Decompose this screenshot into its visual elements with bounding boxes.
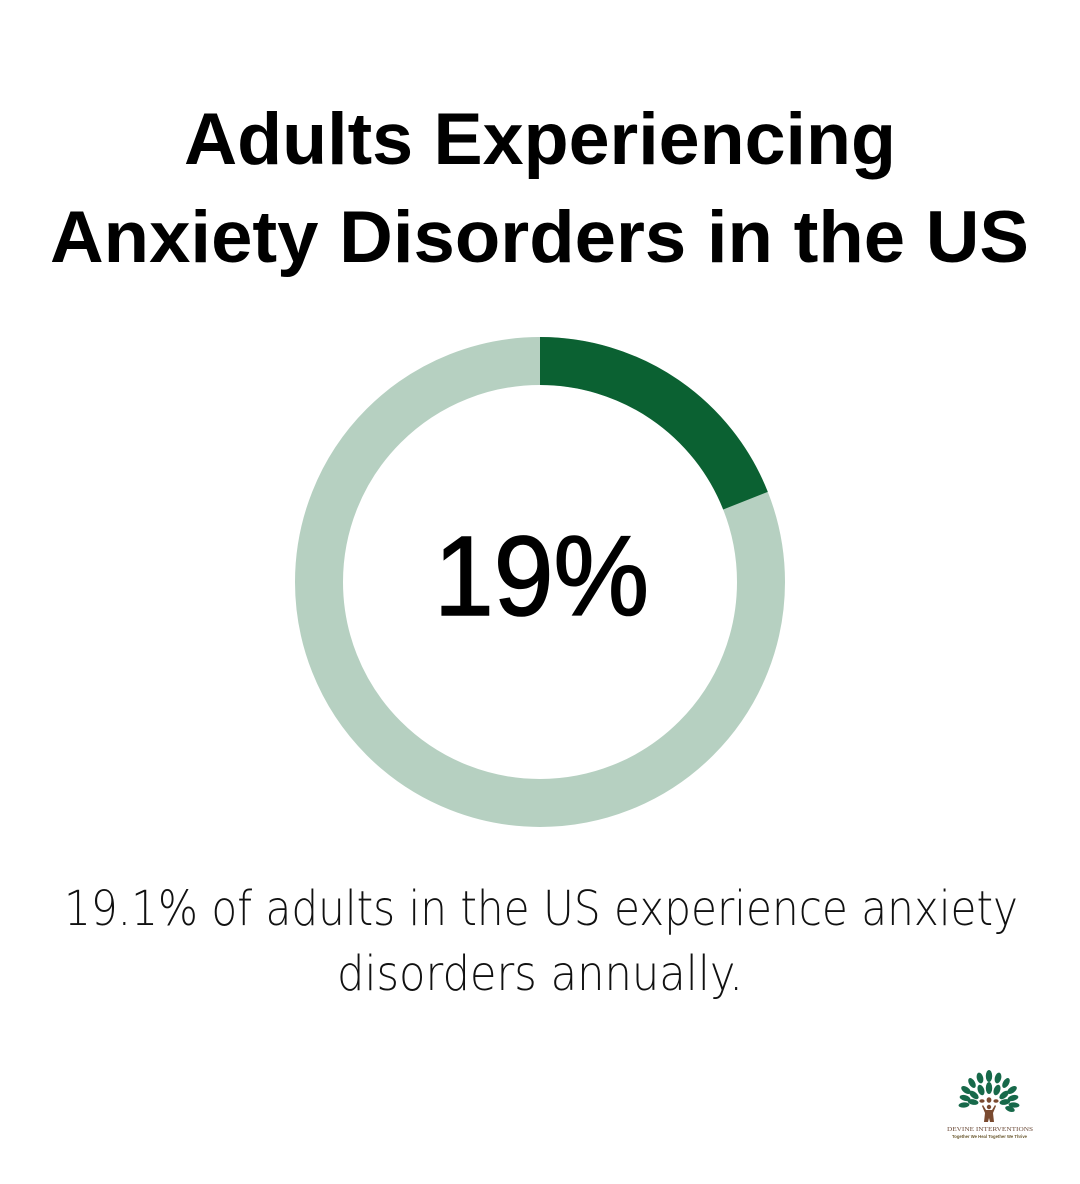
title: Anxiety Disorders in the US bbox=[50, 197, 1029, 278]
icon: tree leaves bbox=[958, 1070, 1020, 1113]
title: Adults Experiencing bbox=[184, 99, 896, 180]
title bbox=[50, 99, 1029, 278]
logo tagline: Together We Heal Together We Thrive bbox=[952, 1134, 1027, 1140]
logo name: DEVINE INTERVENTIONS bbox=[947, 1126, 1033, 1133]
donut centre value: 19% bbox=[434, 513, 649, 639]
donut chart: 19% bbox=[319, 361, 761, 803]
description text bbox=[64, 881, 1018, 1002]
logo: Devine Interventions bbox=[947, 1070, 1033, 1140]
icon: tree trunk figure bbox=[979, 1097, 999, 1122]
description text: disorders annually. bbox=[337, 946, 743, 1002]
